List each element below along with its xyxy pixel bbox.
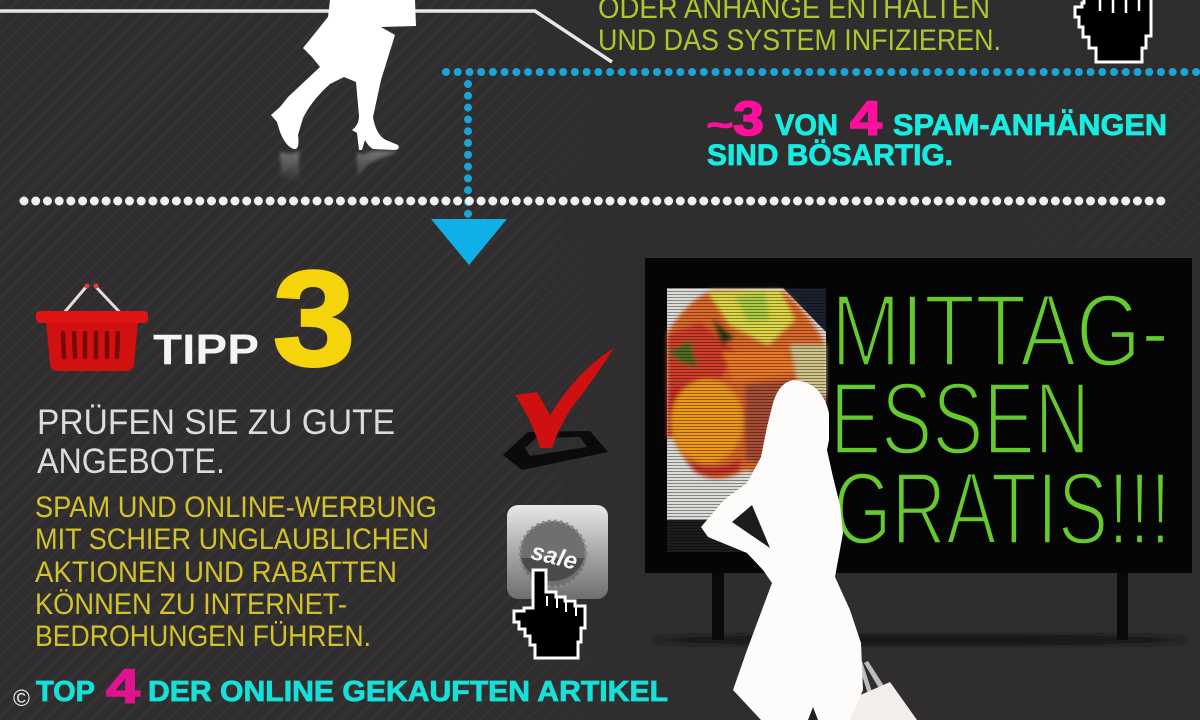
icon: red shopping basket — [36, 284, 148, 371]
billboard — [645, 258, 1192, 646]
body text: yellow: MIT SCHIER UNGLAUBLICHEN — [35, 523, 429, 556]
heading: Tipp 3 — [153, 243, 355, 394]
silhouette: woman with shopping bags — [701, 380, 917, 720]
icon: sale button with pixel hand: sale — [528, 538, 580, 576]
top 4 heading: TOP — [36, 676, 95, 708]
stat: 3 of 4 spam attachments: SIND BÖSARTIG. — [707, 139, 953, 172]
subheading: PRÜFEN SIE ZU GUTE — [37, 403, 395, 442]
blue dotted connector — [446, 72, 1200, 214]
top right text: green warning: UND DAS SYSTEM INFIZIEREN. — [598, 24, 1001, 57]
food picture — [667, 288, 826, 552]
stat: 3 of 4 spam attachments: 4 — [850, 93, 882, 146]
top 4 heading: DER ONLINE GEKAUFTEN ARTIKEL — [148, 676, 668, 708]
subheading — [37, 403, 395, 481]
stat: 3 of 4 spam attachments: 3 — [733, 93, 764, 146]
subheading: ANGEBOTE. — [37, 442, 225, 481]
body text: yellow: SPAM UND ONLINE-WERBUNG — [35, 491, 437, 524]
arrow: blue triangle — [431, 219, 507, 265]
stat: 3 of 4 spam attachments: ~ — [707, 109, 733, 142]
connector line: white rule with diagonal — [0, 11, 612, 62]
icon: sale button with pixel hand — [507, 505, 608, 658]
body text: yellow: AKTIONEN UND RABATTEN — [35, 556, 397, 589]
stat: 3 of 4 spam attachments — [707, 93, 1167, 172]
top right text: green warning — [598, 0, 1001, 57]
icon: pixel hand cursor top — [1075, 0, 1151, 62]
billboard headline — [830, 273, 1171, 566]
body text: yellow — [35, 491, 437, 653]
stat: 3 of 4 spam attachments: VON — [775, 109, 838, 142]
billboard headline: ESSEN — [830, 361, 1090, 476]
heading: Tipp 3: TIPP — [153, 326, 259, 374]
stat: 3 of 4 spam attachments: SPAM-ANHÄNGEN — [893, 109, 1167, 142]
copyright mark: © — [13, 685, 30, 711]
body text: yellow: BEDROHUNGEN FÜHREN. — [35, 620, 371, 653]
heading: Tipp 3: 3 — [273, 243, 355, 394]
top 4 heading — [36, 661, 668, 714]
body text: yellow: KÖNNEN ZU INTERNET- — [35, 588, 347, 621]
top 4 heading: 4 — [106, 661, 140, 714]
icon: red check mark in box — [503, 348, 614, 470]
white dotted divider — [24, 196, 1166, 206]
silhouette: walking woman legs — [271, 0, 416, 182]
